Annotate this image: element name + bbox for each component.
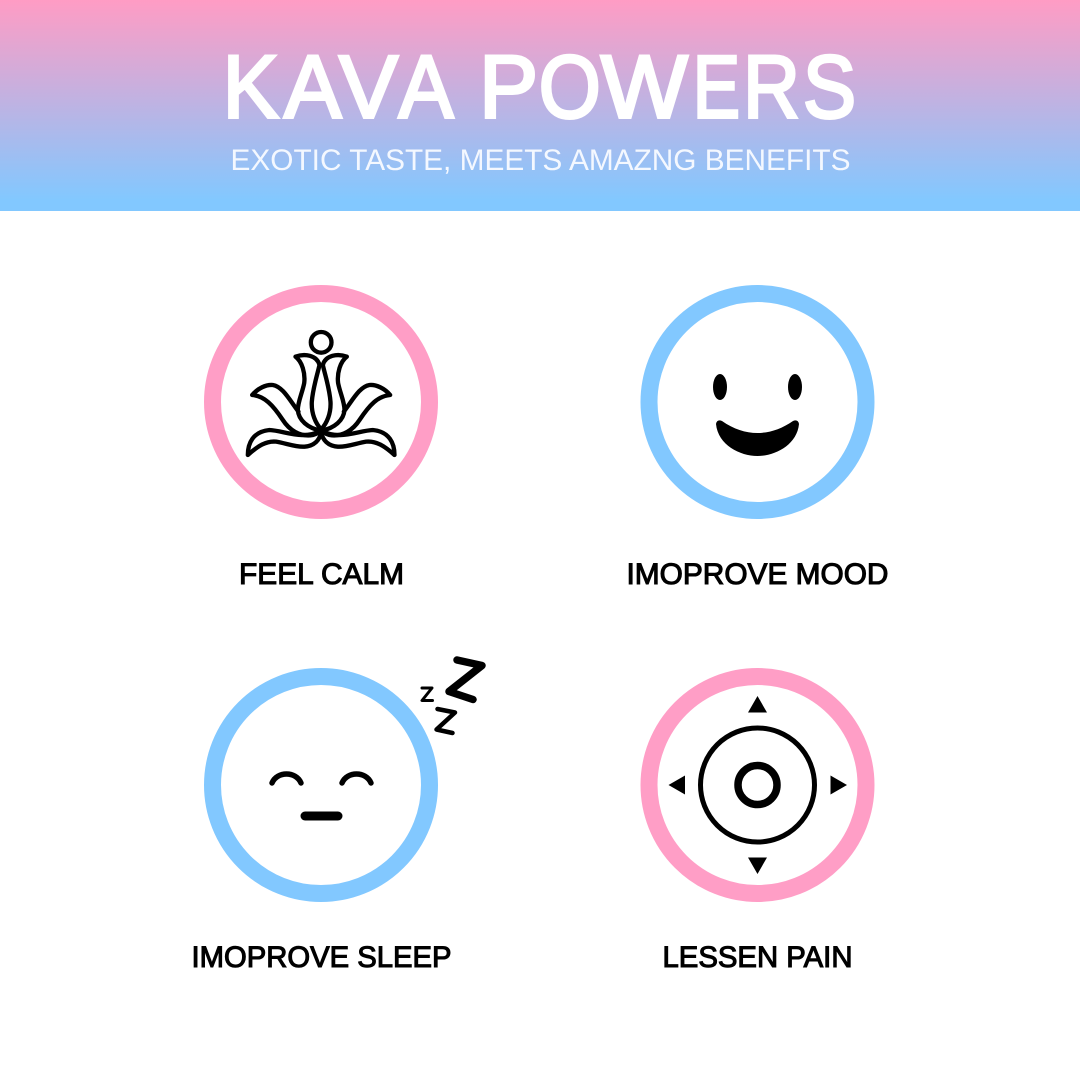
label: feel calm: FEEL CALM: [239, 558, 404, 591]
label: improve sleep: IMOPROVE SLEEP: [192, 941, 452, 974]
icon: sleeping face: [272, 774, 371, 816]
panel: feel calm: [212, 294, 430, 591]
title: V: [339, 38, 398, 136]
title: R: [743, 37, 800, 137]
header banner: [0, 0, 1080, 211]
title: W: [601, 38, 688, 137]
title: A: [398, 38, 454, 137]
icon: zzz: [422, 660, 482, 733]
ring: pink: [212, 294, 430, 510]
icon: joystick target: [668, 696, 847, 874]
panel: improve mood: [626, 294, 888, 591]
ring: pink: [649, 676, 866, 894]
subtitle: EXOTIC TASTE, MEETS AMAZNG BENEFITS: [230, 144, 850, 177]
title: O: [539, 38, 601, 136]
label: lessen pain: LESSEN PAIN: [662, 941, 852, 974]
title: K: [223, 39, 279, 137]
panel: lessen pain: [649, 676, 866, 974]
icon: lotus: [248, 332, 394, 455]
panel: improve sleep: [192, 660, 482, 974]
title: [223, 37, 856, 137]
title: S: [803, 38, 856, 136]
icon: smiling face: [713, 374, 802, 456]
title: A: [284, 37, 342, 137]
label: improve mood: IMOPROVE MOOD: [626, 558, 888, 591]
ring: blue: [212, 676, 430, 894]
title: P: [479, 38, 538, 136]
title: E: [693, 38, 740, 137]
ring: blue: [649, 294, 866, 510]
